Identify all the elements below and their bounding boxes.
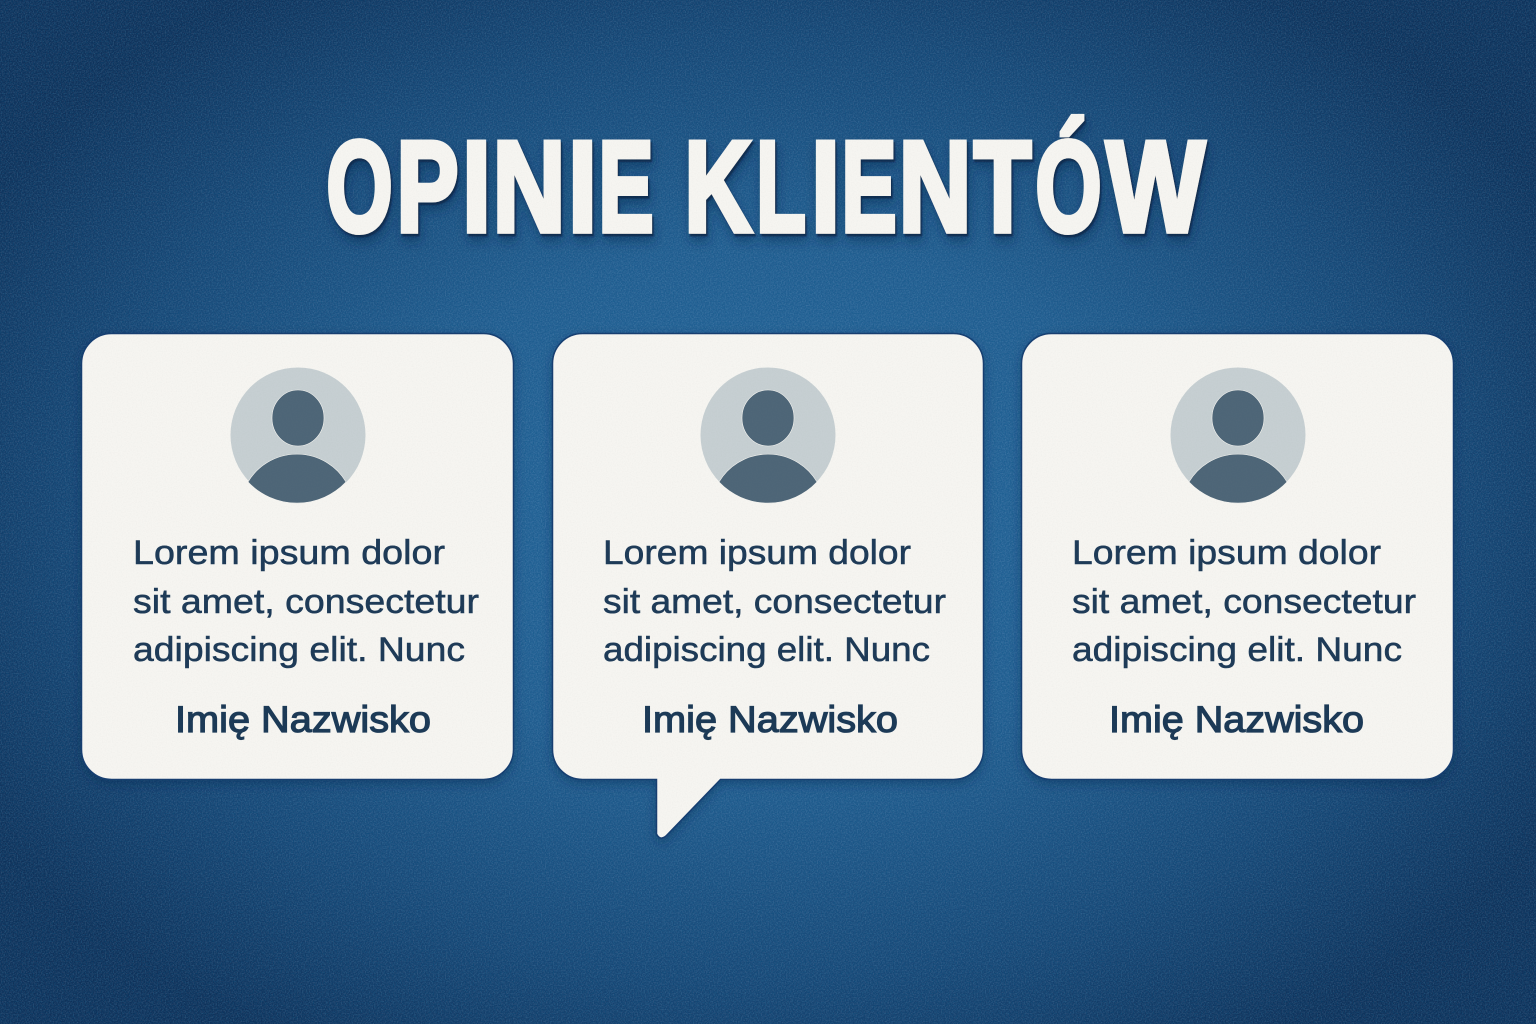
testimonial text 1: Lorem ipsum dolor (133, 534, 445, 572)
title (326, 114, 1205, 259)
testimonial text 2: Lorem ipsum dolor (603, 534, 911, 572)
title: I (568, 114, 597, 259)
icon: avatar 2 (700, 368, 836, 503)
testimonial text 1: adipiscing elit. Nunc (133, 631, 465, 669)
title: W (1106, 115, 1205, 258)
testimonial text 1 (133, 534, 479, 669)
title: E (598, 114, 654, 258)
panel: testimonial card 1 (82, 334, 514, 780)
title: Ó (1035, 115, 1102, 259)
card 1 background (82, 334, 514, 780)
testimonial text 3: sit amet, consectetur (1072, 583, 1416, 621)
testimonial text 2: sit amet, consectetur (603, 583, 946, 621)
icon: avatar 1 (230, 368, 366, 503)
title: I (462, 114, 491, 259)
testimonial text 3: Lorem ipsum dolor (1072, 534, 1381, 572)
title: O (326, 115, 393, 259)
title: P (397, 114, 458, 259)
customer name 2: Imię Nazwisko (642, 699, 898, 740)
card 2 speech bubble background (552, 334, 984, 838)
icon: avatar 3 (1170, 368, 1306, 503)
title: N (493, 114, 565, 259)
testimonial text 2 (603, 534, 946, 669)
title: K (684, 114, 752, 259)
title: I (811, 114, 840, 259)
title: N (899, 114, 971, 259)
testimonial text 3: adipiscing elit. Nunc (1072, 631, 1402, 669)
panel: testimonial card 2 with speech tail (552, 334, 984, 838)
title: T (974, 114, 1031, 258)
testimonial text 3 (1072, 534, 1416, 669)
customer name 1: Imię Nazwisko (175, 699, 431, 740)
title: E (841, 114, 897, 258)
customer name 3: Imię Nazwisko (1109, 699, 1364, 740)
testimonial text 1: sit amet, consectetur (133, 583, 479, 621)
testimonial text 2: adipiscing elit. Nunc (603, 631, 930, 669)
card 3 background (1022, 334, 1454, 780)
title: L (756, 114, 806, 259)
panel: testimonial card 3 (1022, 334, 1454, 780)
